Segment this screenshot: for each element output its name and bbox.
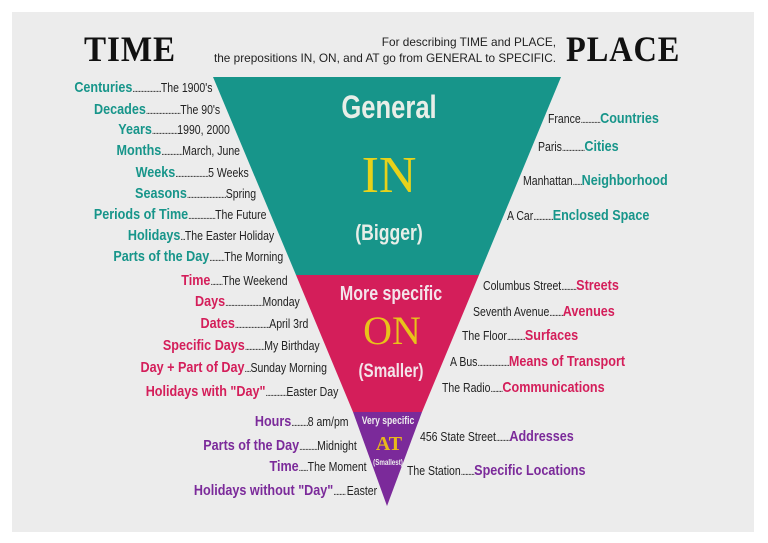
section: AT purple: Very specific	[362, 415, 415, 427]
text: 456 State Street.........Addresses	[420, 428, 574, 445]
text: Periods of Time..................The Future	[93, 206, 266, 223]
section: AT purple: AT	[376, 433, 403, 455]
place list: AT	[407, 428, 586, 479]
subtitle: For describing TIME and PLACE,	[382, 35, 556, 49]
section: ON pink: (Smaller)	[359, 359, 423, 381]
text: Holidays...The Easter Holiday	[128, 227, 274, 244]
text: The Station.........Specific Locations	[407, 462, 586, 479]
text: Day + Part of Day....Sunday Morning	[141, 359, 327, 376]
section: IN green: (Bigger)	[355, 221, 423, 246]
text: The Radio........Communications	[442, 379, 605, 396]
text: Days.........................Monday	[195, 293, 300, 310]
text: Hours...........8 am/pm	[255, 413, 349, 430]
text: Months..............March, June	[117, 142, 240, 159]
subtitle	[214, 35, 556, 65]
title: PLACE: PLACE	[566, 29, 680, 69]
text: Seasons..........................Spring	[135, 185, 256, 202]
text: Dates.......................April 3rd	[200, 315, 308, 332]
text: Parts of the Day............Midnight	[203, 437, 357, 454]
time list: IN	[74, 79, 283, 265]
text: Holidays without "Day"........ Easter	[194, 482, 377, 499]
place list: ON	[442, 277, 625, 396]
section: AT purple	[353, 412, 422, 506]
text: Years.................1990, 2000	[118, 121, 230, 138]
section: ON pink: More specific	[340, 282, 442, 304]
text: Time........The Weekend	[182, 272, 288, 289]
text: Weeks......................5 Weeks	[136, 164, 249, 181]
section: ON pink	[296, 275, 479, 412]
text: Centuries...................The 1900's	[74, 79, 212, 96]
text: France.............Countries	[548, 110, 659, 127]
subtitle: the prepositions IN, ON, and AT go from GENERAL to SPECIFIC.	[214, 51, 556, 65]
text: Paris...............Cities	[538, 138, 619, 155]
text: Seventh Avenue.........Avenues	[473, 303, 615, 320]
text: Columbus Street..........Streets	[483, 277, 619, 294]
section: IN green	[213, 77, 561, 275]
title: TIME: TIME	[84, 29, 176, 69]
text: The Floor............Surfaces	[462, 327, 578, 344]
text: Decades.......................The 90's	[94, 101, 220, 118]
text: Holidays with "Day"..............Easter Day	[145, 383, 338, 400]
text: Parts of the Day..........The Morning	[113, 248, 283, 265]
section: IN green: IN	[362, 147, 416, 204]
section: IN green: General	[341, 90, 437, 126]
text: Specific Days.............My Birthday	[163, 337, 320, 354]
section: AT purple: (Smallest)	[373, 458, 403, 467]
text: Time......The Moment	[270, 458, 367, 475]
text: Manhattan......Neighborhood	[523, 172, 668, 189]
time list: ON	[141, 272, 338, 400]
text: A Car.............Enclosed Space	[507, 207, 649, 224]
time list: AT	[194, 413, 377, 499]
section: ON pink: ON	[363, 308, 421, 353]
place list: IN	[507, 110, 668, 224]
text: A Bus.....................Means of Transport	[450, 353, 625, 370]
